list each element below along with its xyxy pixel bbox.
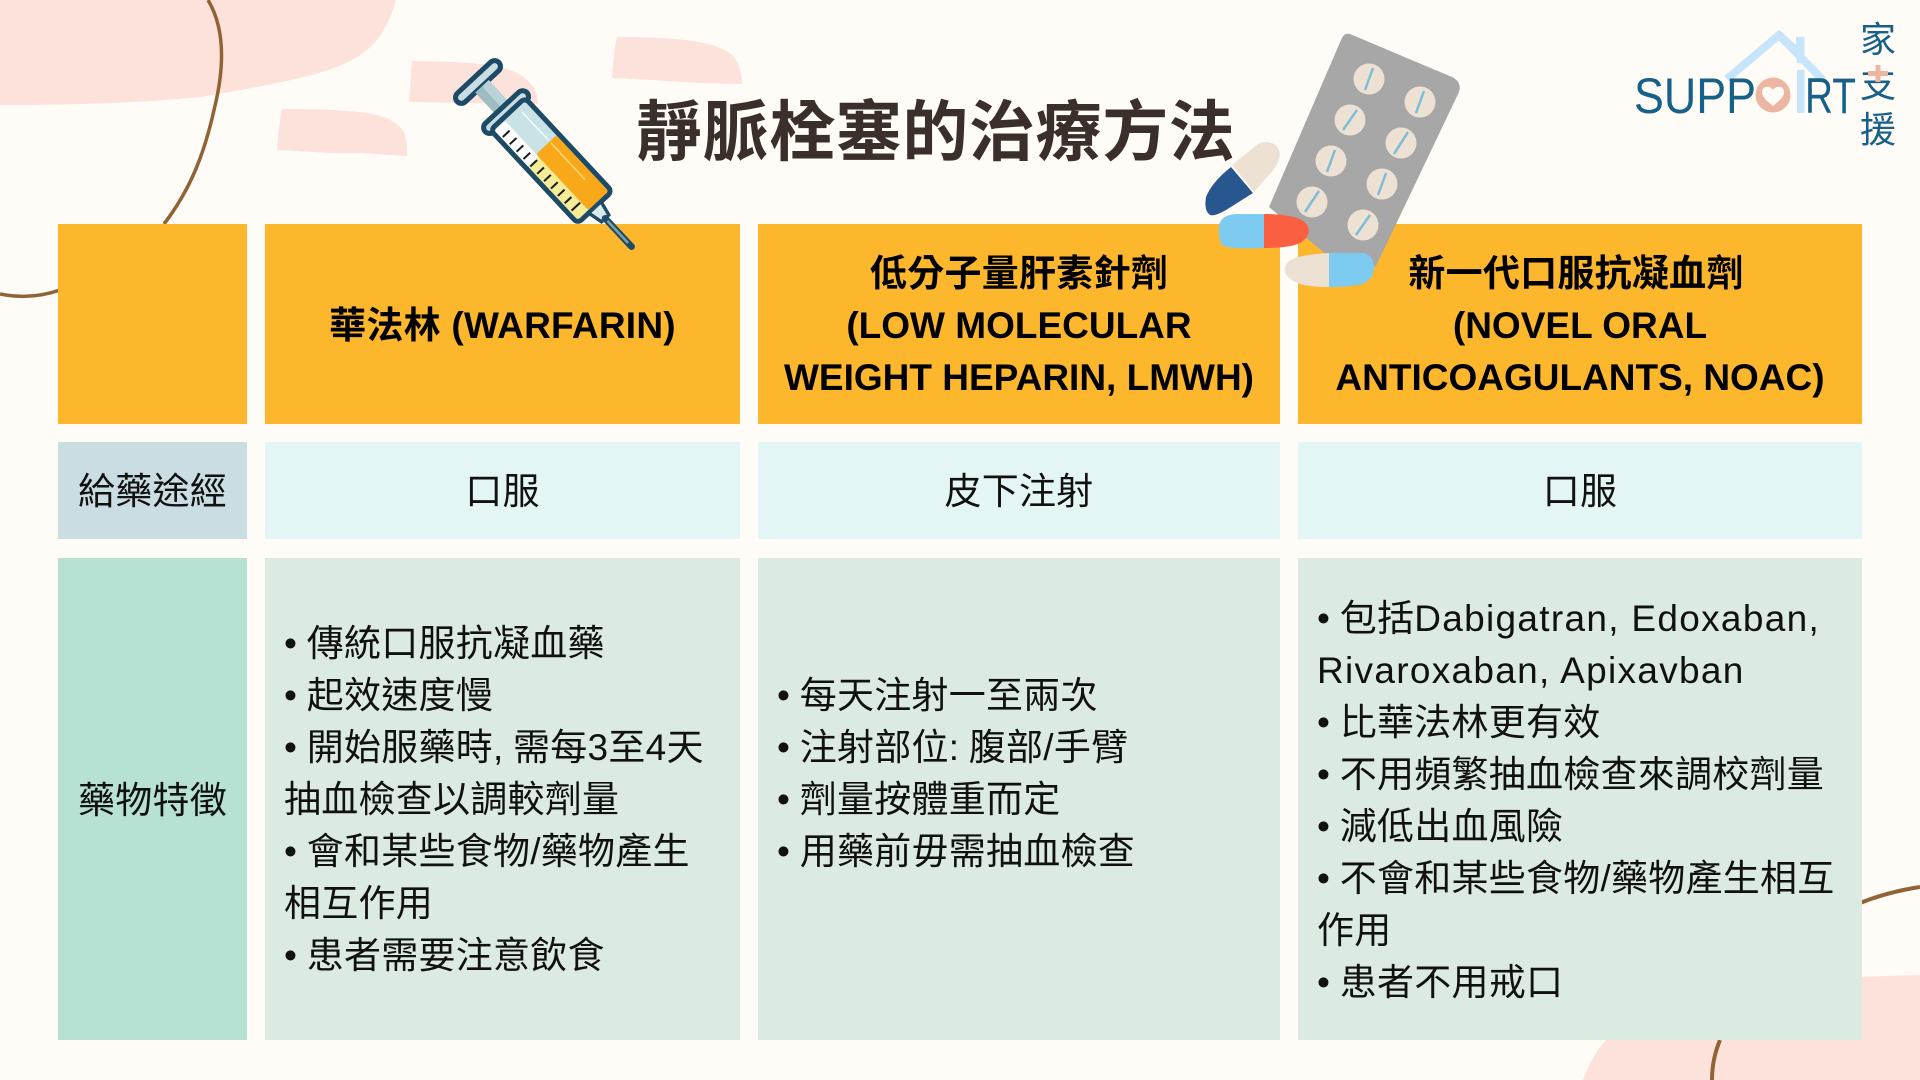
- features: LMWH: [758, 558, 1280, 1040]
- logo Chinese characters: [1860, 19, 1896, 150]
- header cell: NOAC: 新一代口服抗凝血劑: [1408, 252, 1744, 294]
- features: NOAC: • 包括Dabigatran, Edoxaban,: [1317, 598, 1820, 639]
- logo wordmark: [1634, 68, 1856, 124]
- logo wordmark: SUPP: [1634, 68, 1756, 124]
- route: NOAC: 口服: [1543, 471, 1617, 512]
- row label: route: 給藥途經: [78, 471, 227, 512]
- header cell: warfarin: 華法林 (WARFARIN): [329, 304, 676, 346]
- features: NOAC: • 不用頻繁抽血檢查來調校劑量: [1317, 754, 1824, 795]
- header cell: empty: [58, 224, 247, 424]
- route: warfarin: [265, 442, 740, 539]
- logo wordmark: RT: [1805, 68, 1856, 124]
- features: warfarin: • 會和某些食物/藥物產生: [284, 831, 690, 872]
- features: NOAC: • 患者不用戒口: [1317, 962, 1563, 1003]
- row label: route: [58, 442, 247, 539]
- route: NOAC: [1298, 442, 1862, 539]
- logo pink plus: [1868, 65, 1888, 82]
- header cell: warfarin: [265, 224, 740, 424]
- row label: features: [58, 558, 247, 1040]
- features: NOAC: 作用: [1317, 910, 1392, 951]
- capsule: navy and cream: [1205, 142, 1280, 215]
- header cell: NOAC: [1298, 224, 1862, 424]
- header cell: LMWH: 低分子量肝素針劑: [870, 252, 1168, 294]
- capsule: cream and blue: [1285, 253, 1374, 287]
- features: warfarin: 抽血檢查以調較劑量: [284, 779, 619, 820]
- features: warfarin: • 患者需要注意飲食: [284, 935, 605, 976]
- features: LMWH: • 用藥前毋需抽血檢查: [777, 831, 1135, 872]
- features: warfarin: [265, 558, 740, 1040]
- features: NOAC: [1298, 558, 1862, 1040]
- features: NOAC: • 比華法林更有效: [1317, 702, 1600, 743]
- features: LMWH: • 劑量按體重而定: [777, 779, 1060, 820]
- features: warfarin: • 傳統口服抗凝血藥: [284, 623, 605, 664]
- features: warfarin: 相互作用: [284, 883, 433, 924]
- header cell: LMWH: [758, 224, 1280, 424]
- header cell: LMWH: (LOW MOLECULAR: [846, 304, 1192, 346]
- logo house icon: [1727, 35, 1823, 113]
- features: warfarin: • 起效速度慢: [284, 675, 493, 716]
- route: LMWH: 皮下注射: [944, 471, 1094, 512]
- features: LMWH: • 注射部位: 腹部/手臂: [777, 727, 1128, 768]
- features: NOAC: • 減低出血風險: [1317, 806, 1563, 847]
- header cell: NOAC: ANTICOAGULANTS, NOAC): [1335, 356, 1825, 398]
- logo Chinese characters: 家: [1860, 19, 1896, 60]
- row label: features: 藥物特徵: [78, 780, 227, 820]
- capsule: blue and red: [1219, 214, 1309, 248]
- features: warfarin: • 開始服藥時, 需每3至4天: [284, 727, 704, 768]
- header cell: LMWH: WEIGHT HEPARIN, LMWH): [784, 356, 1254, 398]
- logo Chinese characters: 支: [1860, 64, 1896, 105]
- blister pack: [1269, 34, 1460, 270]
- route: LMWH: [758, 442, 1280, 539]
- route: warfarin: 口服: [465, 471, 540, 512]
- header cell: NOAC: (NOVEL ORAL: [1453, 304, 1707, 346]
- logo: Support family support: [1634, 19, 1896, 150]
- features: NOAC: Rivaroxaban, Apixavban: [1317, 650, 1745, 691]
- features: LMWH: • 每天注射一至兩次: [777, 675, 1098, 716]
- logo heart circle: [1756, 78, 1790, 112]
- features: NOAC: • 不會和某些食物/藥物產生相互: [1317, 858, 1835, 899]
- logo Chinese characters: 援: [1860, 109, 1896, 150]
- title: 靜脈栓塞的治療方法: [636, 95, 1235, 169]
